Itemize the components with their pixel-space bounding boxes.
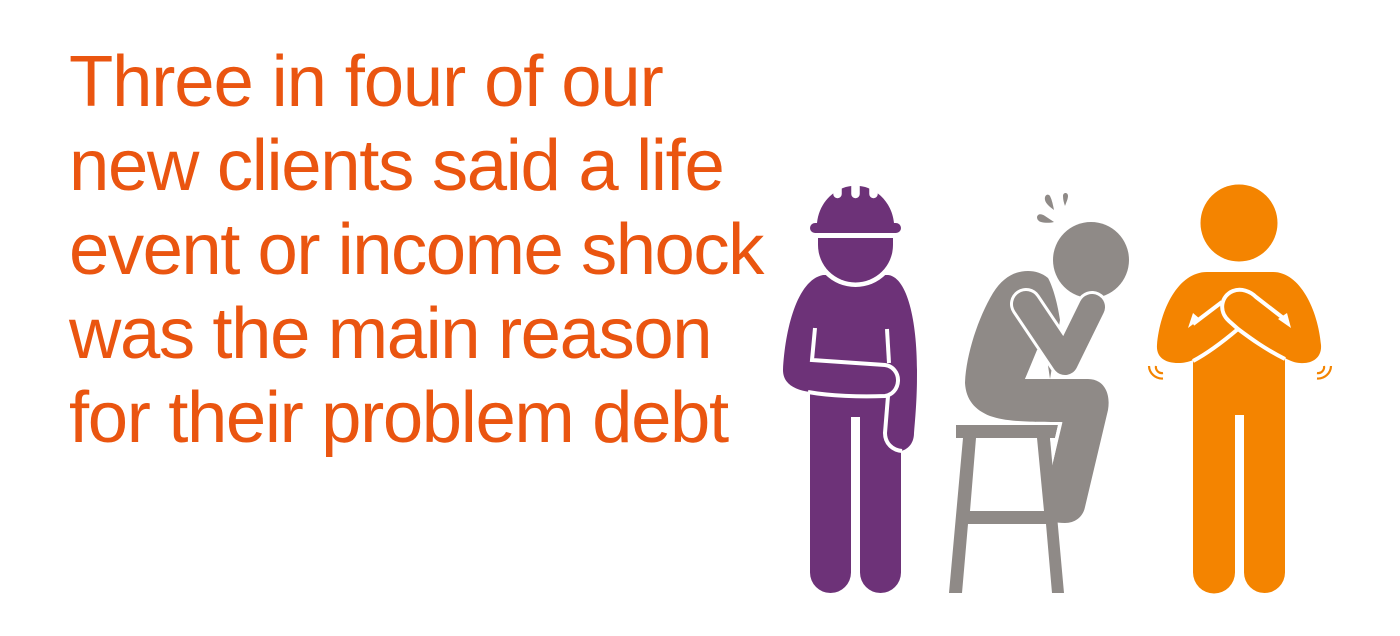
heading: three in four clients statement: event or income shock bbox=[69, 209, 765, 290]
heading: three in four clients statement: Three in four of our bbox=[69, 41, 663, 122]
arm notch right bbox=[1278, 313, 1291, 328]
trembling marks right bbox=[1317, 366, 1331, 379]
stress marks bbox=[1037, 193, 1068, 223]
seated body bbox=[965, 271, 1109, 523]
trembling marks left bbox=[1149, 366, 1163, 379]
heading: three in four clients statement: new clients said a life bbox=[69, 125, 723, 206]
arm notch left bbox=[1188, 313, 1200, 328]
heading: three in four clients statement: was the main reason bbox=[68, 293, 711, 374]
icon: grey worried person on stool bbox=[949, 193, 1129, 593]
heading: three in four clients statement bbox=[68, 41, 765, 458]
icon: purple construction worker bbox=[783, 180, 917, 593]
heading: three in four clients statement: for their problem debt bbox=[69, 377, 729, 458]
head bbox=[1053, 222, 1129, 298]
arm bbox=[1026, 304, 1092, 362]
icon: orange person with trembling arms bbox=[1149, 184, 1331, 594]
stool bbox=[949, 425, 1064, 593]
